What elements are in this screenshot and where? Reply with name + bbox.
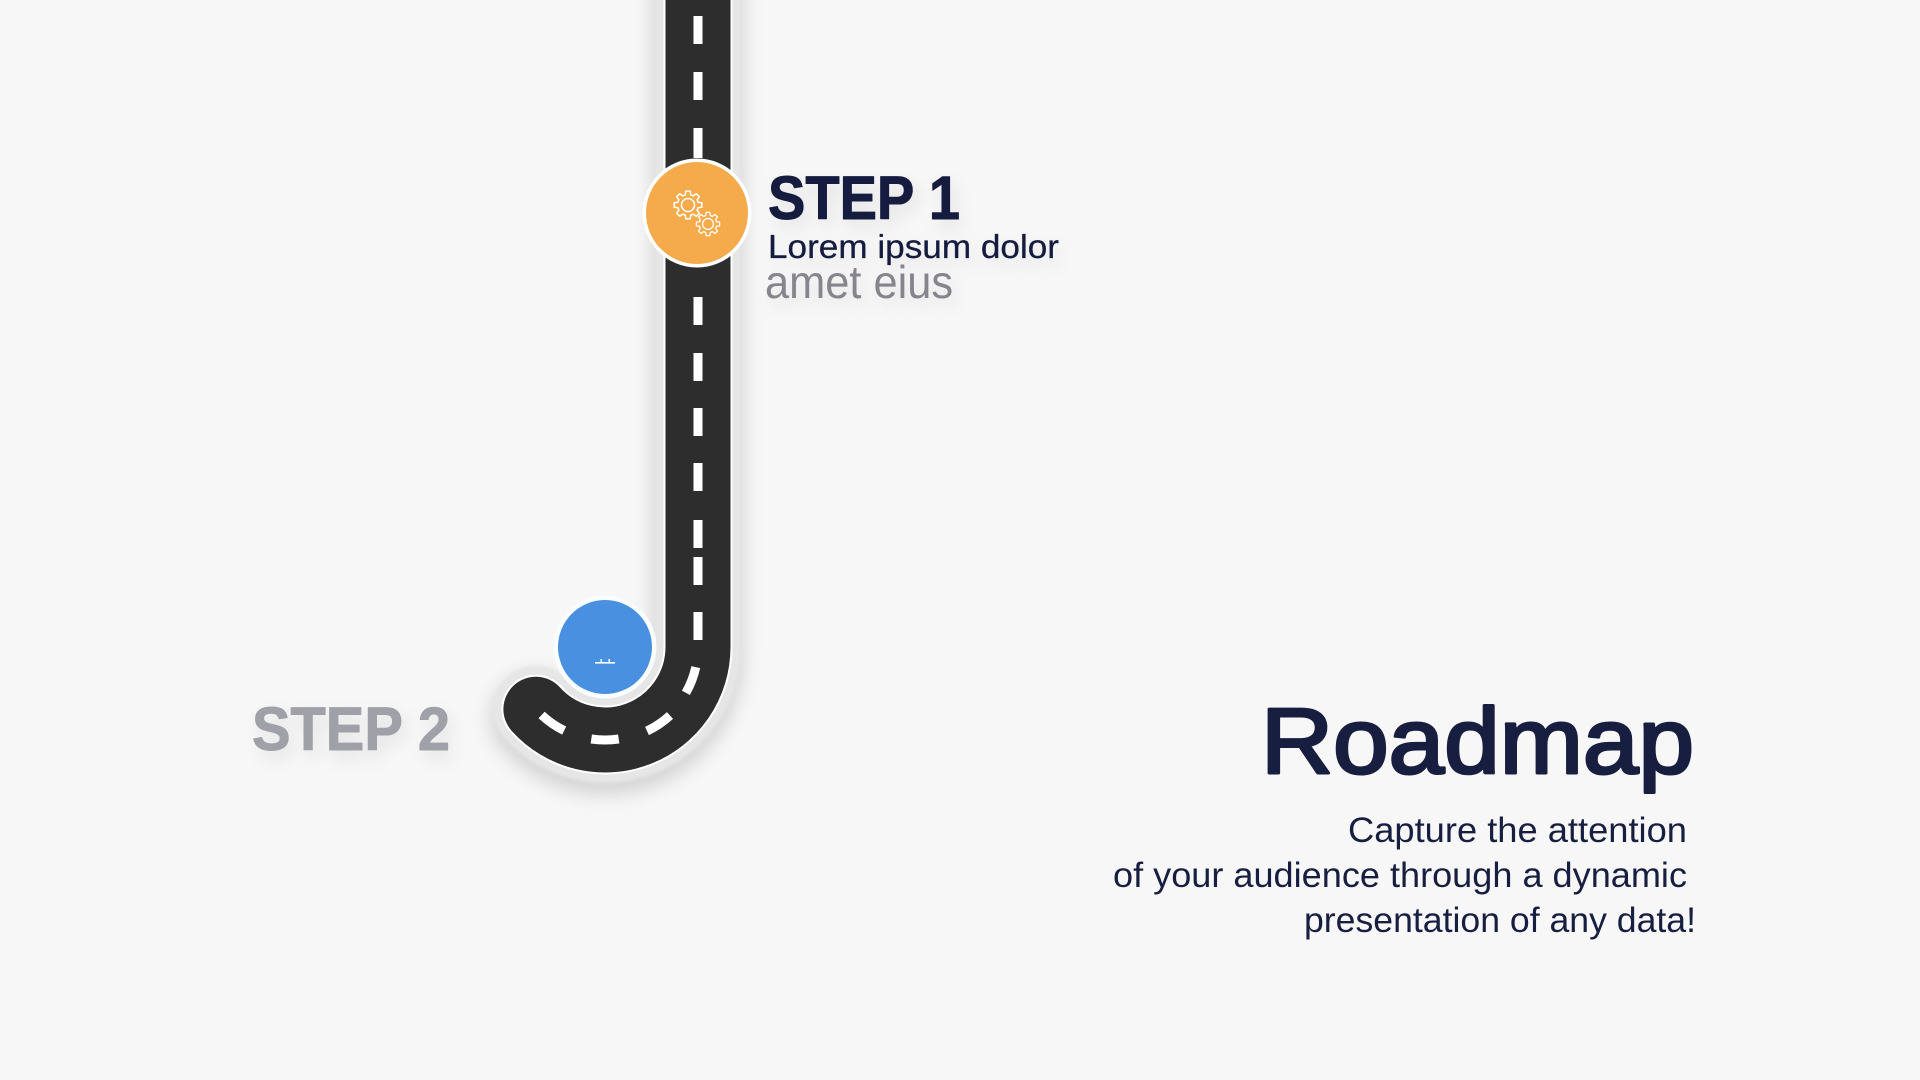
description text block: presentation of any data! [1304, 901, 1696, 940]
description text block: of your audience through a dynamic [1113, 856, 1687, 895]
road centre dashes [542, 16, 702, 740]
road [536, 0, 702, 749]
step 1 description line: Lorem ipsum dolor [768, 228, 1059, 265]
step 1 marker [642, 158, 752, 268]
description text block: Capture the attention [1348, 811, 1687, 850]
step 1 fading line: amet eius [765, 256, 953, 308]
step 2 marker [554, 596, 656, 698]
step 1 heading: STEP 1 [768, 164, 960, 232]
step 2 heading: STEP 2 [252, 695, 450, 763]
icon: gears [674, 191, 720, 236]
step 1 text block [765, 164, 1059, 308]
title: Roadmap [1261, 689, 1694, 793]
description text block [1113, 811, 1696, 940]
icon: partial bar mark [595, 659, 615, 664]
